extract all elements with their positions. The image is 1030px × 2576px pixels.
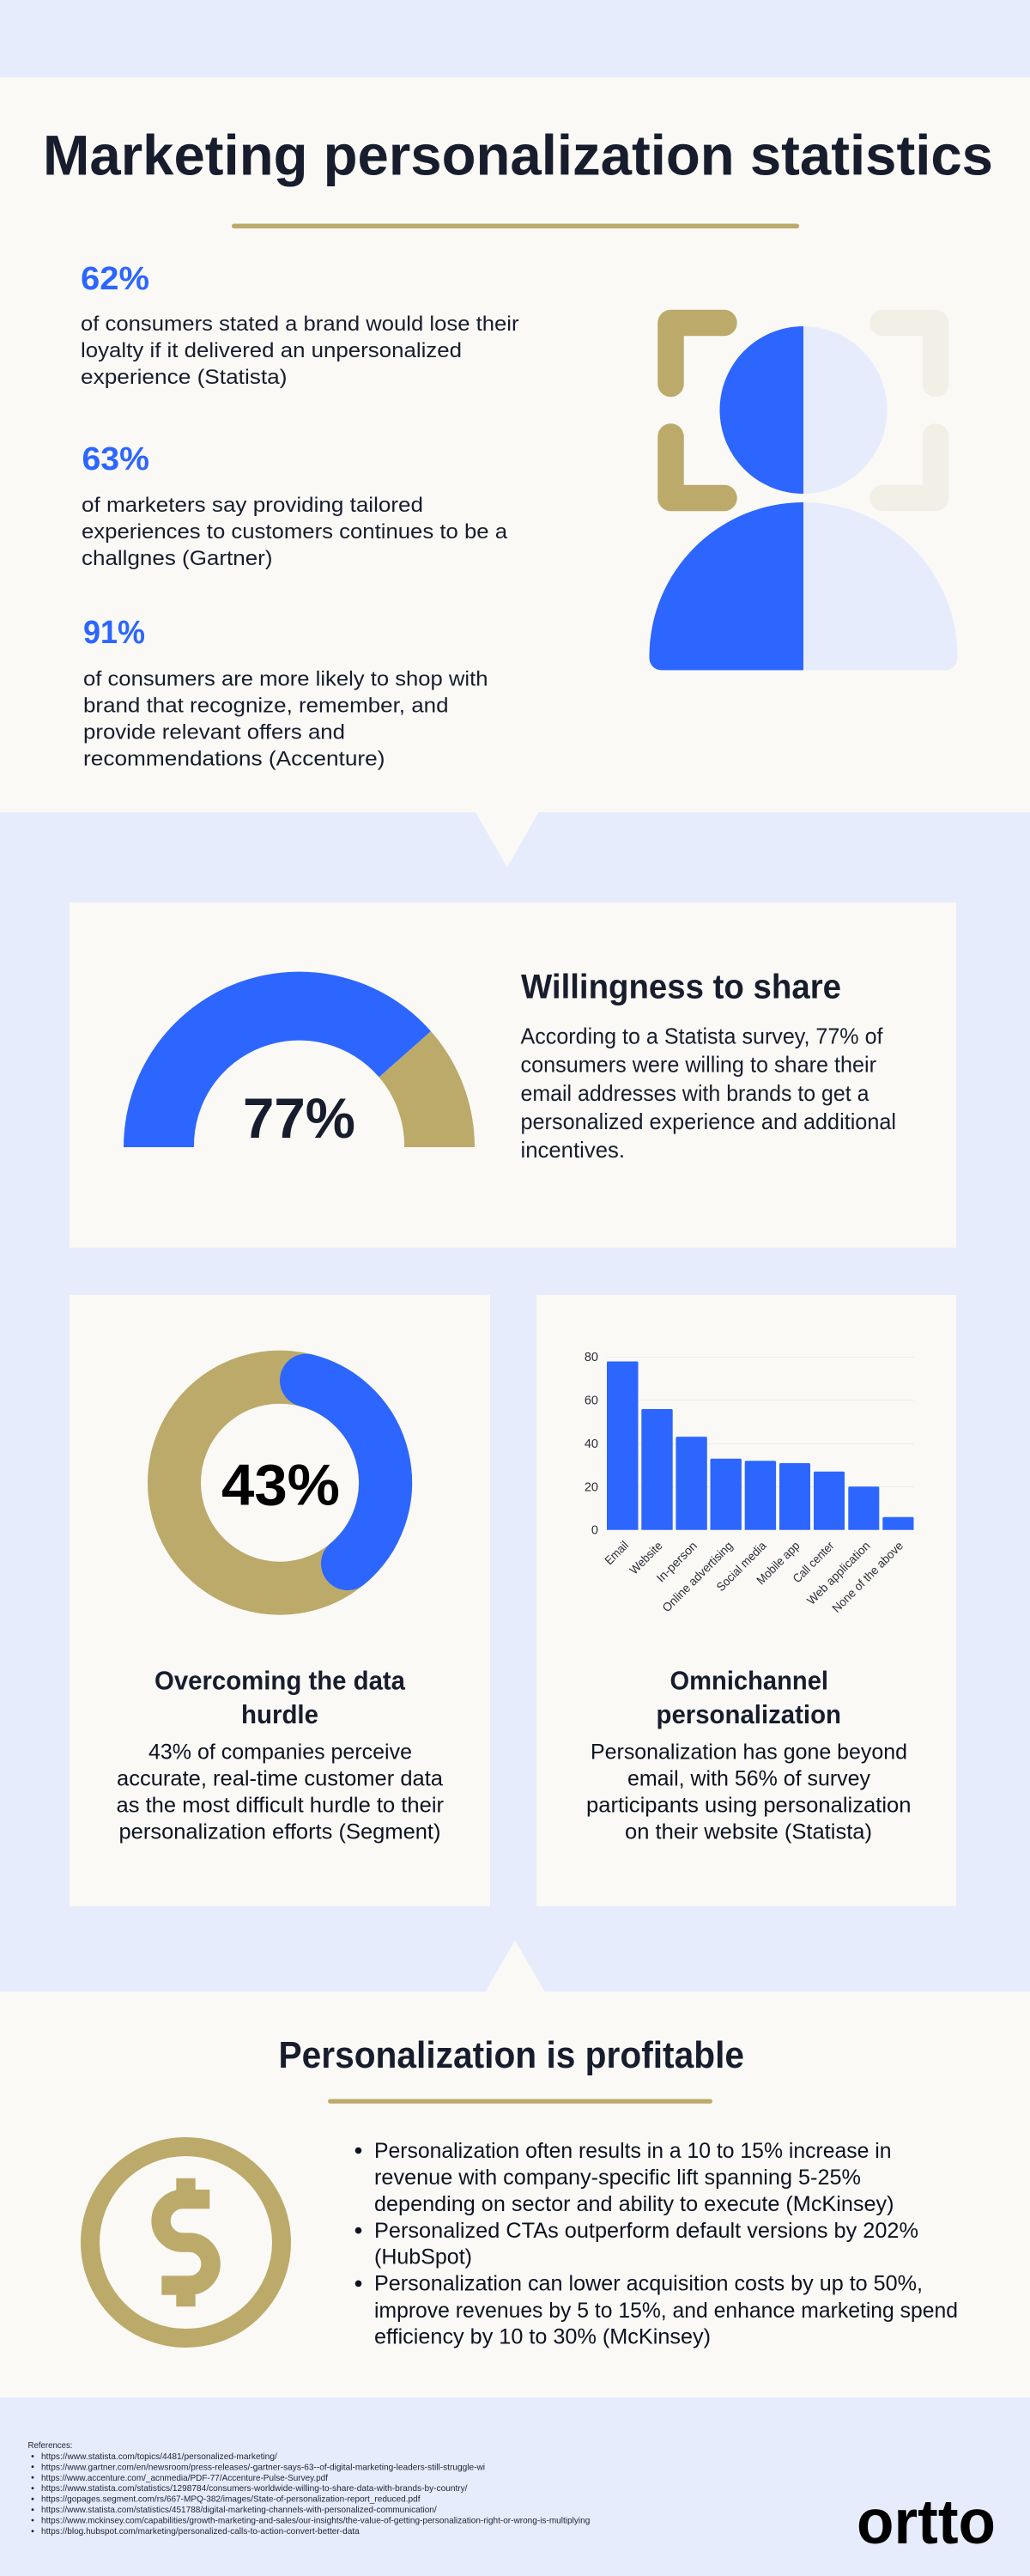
- bar chart: personalization channels: In-person: [653, 1539, 700, 1585]
- references list: https://www.accenture.com/_acnmedia/PDF-77/Accenture-Pulse-Survey.pdf: [41, 2473, 328, 2483]
- panel: personalization is profitable: [0, 1941, 1030, 2397]
- statistic: 63%: experiences to customers continues to be a: [82, 520, 507, 544]
- donut chart: 43%: 43%: [221, 1453, 340, 1518]
- gauge chart: 77%: 77%: [243, 1086, 355, 1150]
- statistic: 91%: recommendations (Accenture): [83, 747, 385, 771]
- statistic: 62%: of consumers stated a brand would lose their: [81, 313, 518, 336]
- text block: data hurdle description: as the most difficult hurdle to their: [117, 1793, 444, 1817]
- panel: willingness to share: [70, 902, 956, 1248]
- gauge chart: 77%: [124, 972, 475, 1150]
- panel: intro statistics: [0, 77, 1030, 867]
- bar chart: personalization channels: 0: [591, 1523, 598, 1537]
- bullet list: profitability facts: improve revenues by 5 to 15%, and enhance marketing spend: [374, 2299, 958, 2323]
- panel: omnichannel personalization: [536, 1295, 956, 1906]
- statistic: 91%: of consumers are more likely to shop with: [83, 668, 488, 690]
- heading: willingness to share: Willingness to share: [521, 969, 841, 1006]
- statistic: 91%: [83, 615, 488, 771]
- bullet list: profitability facts: revenue with company-specific lift spanning 5-25%: [374, 2166, 861, 2190]
- bullet list: profitability facts: efficiency by 10 to 30% (McKinsey): [374, 2325, 711, 2349]
- logo: ortto: ortto: [857, 2488, 996, 2557]
- text block: omnichannel description: [586, 1740, 912, 1844]
- text block: willingness description: incentives.: [520, 1137, 625, 1163]
- bar chart: personalization channels: Website: [627, 1539, 665, 1577]
- bullet list: profitability facts: Personalized CTAs outperform default versions by 202%: [374, 2219, 918, 2243]
- panel: overcoming the data hurdle: [70, 1295, 490, 1906]
- references list: https://www.gartner.com/en/newsroom/press-releases/-gartner-says-63--of-digital-marketing-leaders-still-struggle-wi: [41, 2462, 485, 2472]
- text block: willingness description: According to a Statista survey, 77% of: [520, 1024, 883, 1049]
- heading: overcoming the data hurdle: [154, 1666, 406, 1729]
- heading underline: [328, 2099, 712, 2104]
- text block: data hurdle description: 43% of companies perceive: [148, 1740, 412, 1764]
- statistic: 63%: challgnes (Gartner): [82, 547, 273, 570]
- bar chart: personalization channels: 60: [585, 1394, 598, 1408]
- text block: omnichannel description: email, with 56% of survey: [627, 1767, 870, 1791]
- statistic: 62%: experience (Statista): [81, 366, 287, 389]
- text block: willingness description: consumers were willing to share their: [520, 1052, 876, 1078]
- references list: https://gopages.segment.com/rs/667-MPQ-382/images/State-of-personalization-report_reduced.pdf: [41, 2494, 421, 2505]
- statistic: 91%: provide relevant offers and: [83, 721, 345, 744]
- heading: overcoming the data hurdle: Overcoming the data: [154, 1666, 406, 1695]
- bar chart: personalization channels: [585, 1351, 914, 1615]
- bullet list: profitability facts: Personalization often results in a 10 to 15% increase in: [374, 2139, 891, 2163]
- statistic: 62%: [81, 261, 518, 389]
- bar chart: personalization channels: 40: [585, 1437, 598, 1451]
- bullet list: profitability facts: [355, 2139, 958, 2349]
- statistic: 62%: loyalty if it delivered an unpersonalized: [81, 339, 462, 362]
- references list: https://blog.hubspot.com/marketing/personalized-calls-to-action-convert-better-data: [41, 2526, 360, 2537]
- text block: willingness description: [520, 1024, 896, 1163]
- donut chart: 43%: [174, 1377, 385, 1589]
- text block: omnichannel description: participants using personalization: [586, 1793, 912, 1817]
- references list: https://www.mckinsey.com/capabilities/growth-marketing-and-sales/our-insights/the-value-of-getting-personalization-right-or-wrong-is-multiplying: [41, 2515, 590, 2525]
- title: Marketing personalization statistics: [43, 124, 993, 187]
- statistic: 63%: [82, 441, 507, 570]
- heading: overcoming the data hurdle: hurdle: [241, 1699, 318, 1729]
- bar chart: personalization channels: Social media: [713, 1539, 769, 1594]
- heading: omnichannel personalization: personalization: [656, 1699, 841, 1729]
- references list: https://www.statista.com/statistics/1298784/consumers-worldwide-willing-to-share-data-with-brands-by-country/: [41, 2483, 468, 2494]
- text block: data hurdle description: [117, 1740, 444, 1844]
- text block: omnichannel description: Personalization has gone beyond: [591, 1740, 907, 1764]
- bar chart: personalization channels: Email: [602, 1538, 631, 1567]
- bullet list: profitability facts: Personalization can lower acquisition costs by up to 50%,: [374, 2272, 923, 2296]
- statistic: 91%: 91%: [83, 615, 145, 651]
- icon: dollar coin: [90, 2147, 282, 2338]
- references list: References:: [27, 2440, 72, 2451]
- heading: omnichannel personalization: Omnichannel: [670, 1666, 828, 1695]
- text block: data hurdle description: accurate, real-time customer data: [117, 1767, 443, 1791]
- bullet list: profitability facts: depending on sector and ability to execute (McKinsey): [374, 2192, 894, 2216]
- bar chart: personalization channels: None of the above: [829, 1539, 906, 1615]
- references list: [27, 2440, 590, 2537]
- bar chart: personalization channels: 80: [585, 1351, 598, 1364]
- text block: omnichannel description: on their website (Statista): [625, 1820, 872, 1844]
- statistic: 63%: of marketers say providing tailored: [82, 494, 423, 517]
- icon: person in focus brackets: [649, 323, 958, 670]
- references list: https://www.statista.com/statistics/451788/digital-marketing-channels-with-personalized-communication/: [41, 2505, 437, 2515]
- bullet list: profitability facts: (HubSpot): [374, 2245, 472, 2269]
- bar chart: personalization channels: 20: [585, 1480, 598, 1494]
- bar chart: personalization channels: Online advertising: [659, 1539, 736, 1614]
- heading: personalization is profitable: Personalization is profitable: [278, 2034, 744, 2076]
- statistic: 62%: 62%: [81, 261, 149, 297]
- bar chart: personalization channels: Mobile app: [754, 1539, 803, 1587]
- title underline: [232, 223, 799, 228]
- text block: willingness description: personalized experience and additional: [520, 1109, 896, 1134]
- statistic: 91%: brand that recognize, remember, and: [83, 694, 448, 718]
- heading: omnichannel personalization: [656, 1666, 841, 1729]
- statistic: 63%: 63%: [82, 441, 149, 477]
- text block: willingness description: email addresses with brands to get a: [520, 1080, 869, 1106]
- bar chart: personalization channels: Call center: [790, 1539, 837, 1585]
- bar chart: personalization channels: Web application: [804, 1539, 873, 1607]
- text block: data hurdle description: personalization efforts (Segment): [118, 1820, 441, 1844]
- references list: https://www.statista.com/topics/4481/personalized-marketing/: [41, 2451, 277, 2462]
